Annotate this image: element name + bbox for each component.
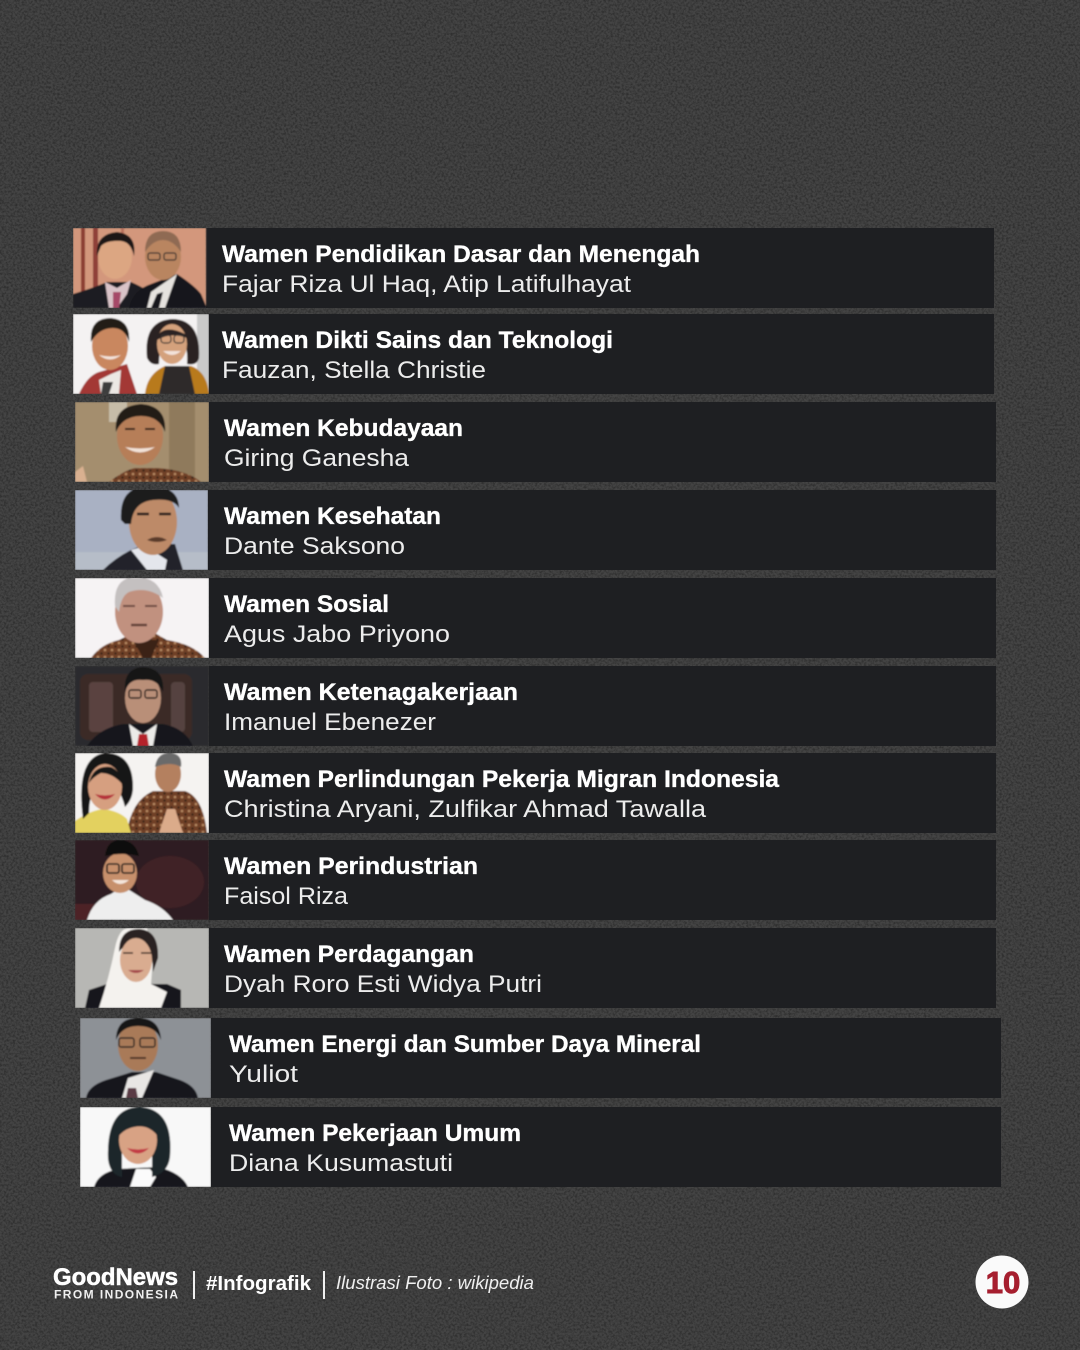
portrait: Fauzan and Stella Christie	[73, 314, 209, 394]
page number badge	[976, 1256, 1028, 1308]
row: Ketenagakerjaan	[75, 666, 996, 746]
name: Faisol Riza	[224, 883, 349, 910]
role heading: Wamen Dikti Sains dan Teknologi	[222, 327, 613, 354]
name: Christina Aryani, Zulfikar Ahmad Tawalla	[224, 796, 707, 823]
portrait: Dante Saksono	[75, 486, 208, 570]
name: Giring Ganesha	[224, 445, 410, 472]
role heading: Wamen Ketenagakerjaan	[224, 679, 518, 706]
row: Perlindungan Pekerja Migran Indonesia	[75, 753, 996, 833]
role heading: Wamen Pendidikan Dasar dan Menengah	[222, 241, 700, 268]
page number badge: 10	[986, 1265, 1020, 1300]
row: Perdagangan	[75, 928, 996, 1008]
row: Pekerjaan Umum	[80, 1107, 1001, 1187]
portrait: Imanuel Ebenezer	[75, 666, 209, 746]
name: Dyah Roro Esti Widya Putri	[224, 971, 542, 998]
footer logo: GoodNews	[53, 1264, 178, 1291]
name: Fauzan, Stella Christie	[222, 357, 486, 384]
portrait: Dyah Roro Esti Widya Putri	[75, 928, 209, 1008]
portrait: Christina Aryani and Zulfikar Ahmad Tawalla	[75, 753, 209, 833]
portrait: Agus Jabo Priyono	[75, 577, 209, 658]
name: Diana Kusumastuti	[229, 1150, 453, 1177]
name: Dante Saksono	[224, 533, 405, 560]
role heading: Wamen Perindustrian	[224, 853, 478, 880]
name: Yuliot	[229, 1061, 298, 1088]
row: Pendidikan Dasar dan Menengah	[73, 228, 994, 308]
role heading: Wamen Sosial	[224, 591, 389, 618]
role heading: Wamen Kebudayaan	[224, 415, 463, 442]
portrait: Faisol Riza	[75, 840, 209, 920]
row: Energi dan Sumber Daya Mineral	[80, 1018, 1001, 1098]
row: Dikti Sains dan Teknologi	[73, 314, 994, 394]
role heading: Wamen Perlindungan Pekerja Migran Indonesia	[224, 766, 780, 793]
row: Perindustrian	[75, 840, 996, 920]
footer logo: FROM INDONESIA	[54, 1288, 178, 1302]
role heading: Wamen Kesehatan	[224, 503, 441, 530]
name: Agus Jabo Priyono	[224, 621, 450, 648]
name: Fajar Riza Ul Haq, Atip Latifulhayat	[222, 271, 631, 298]
photo credit: Ilustrasi Foto : wikipedia	[336, 1273, 534, 1293]
name: Imanuel Ebenezer	[224, 709, 436, 736]
role heading: Wamen Perdagangan	[224, 941, 474, 968]
row: Kesehatan	[75, 486, 996, 570]
portrait: Diana Kusumastuti	[80, 1107, 211, 1187]
footer hashtag: #Infografik	[206, 1273, 312, 1295]
role heading: Wamen Pekerjaan Umum	[229, 1120, 521, 1147]
row: Kebudayaan	[75, 402, 996, 482]
row: Sosial	[75, 577, 996, 658]
portrait: Giring Ganesha	[75, 402, 209, 482]
portrait: Fajar Riza Ul Haq and Atip Latifulhayat	[73, 228, 207, 308]
portrait: Yuliot	[80, 1018, 211, 1098]
role heading: Wamen Energi dan Sumber Daya Mineral	[229, 1031, 701, 1058]
